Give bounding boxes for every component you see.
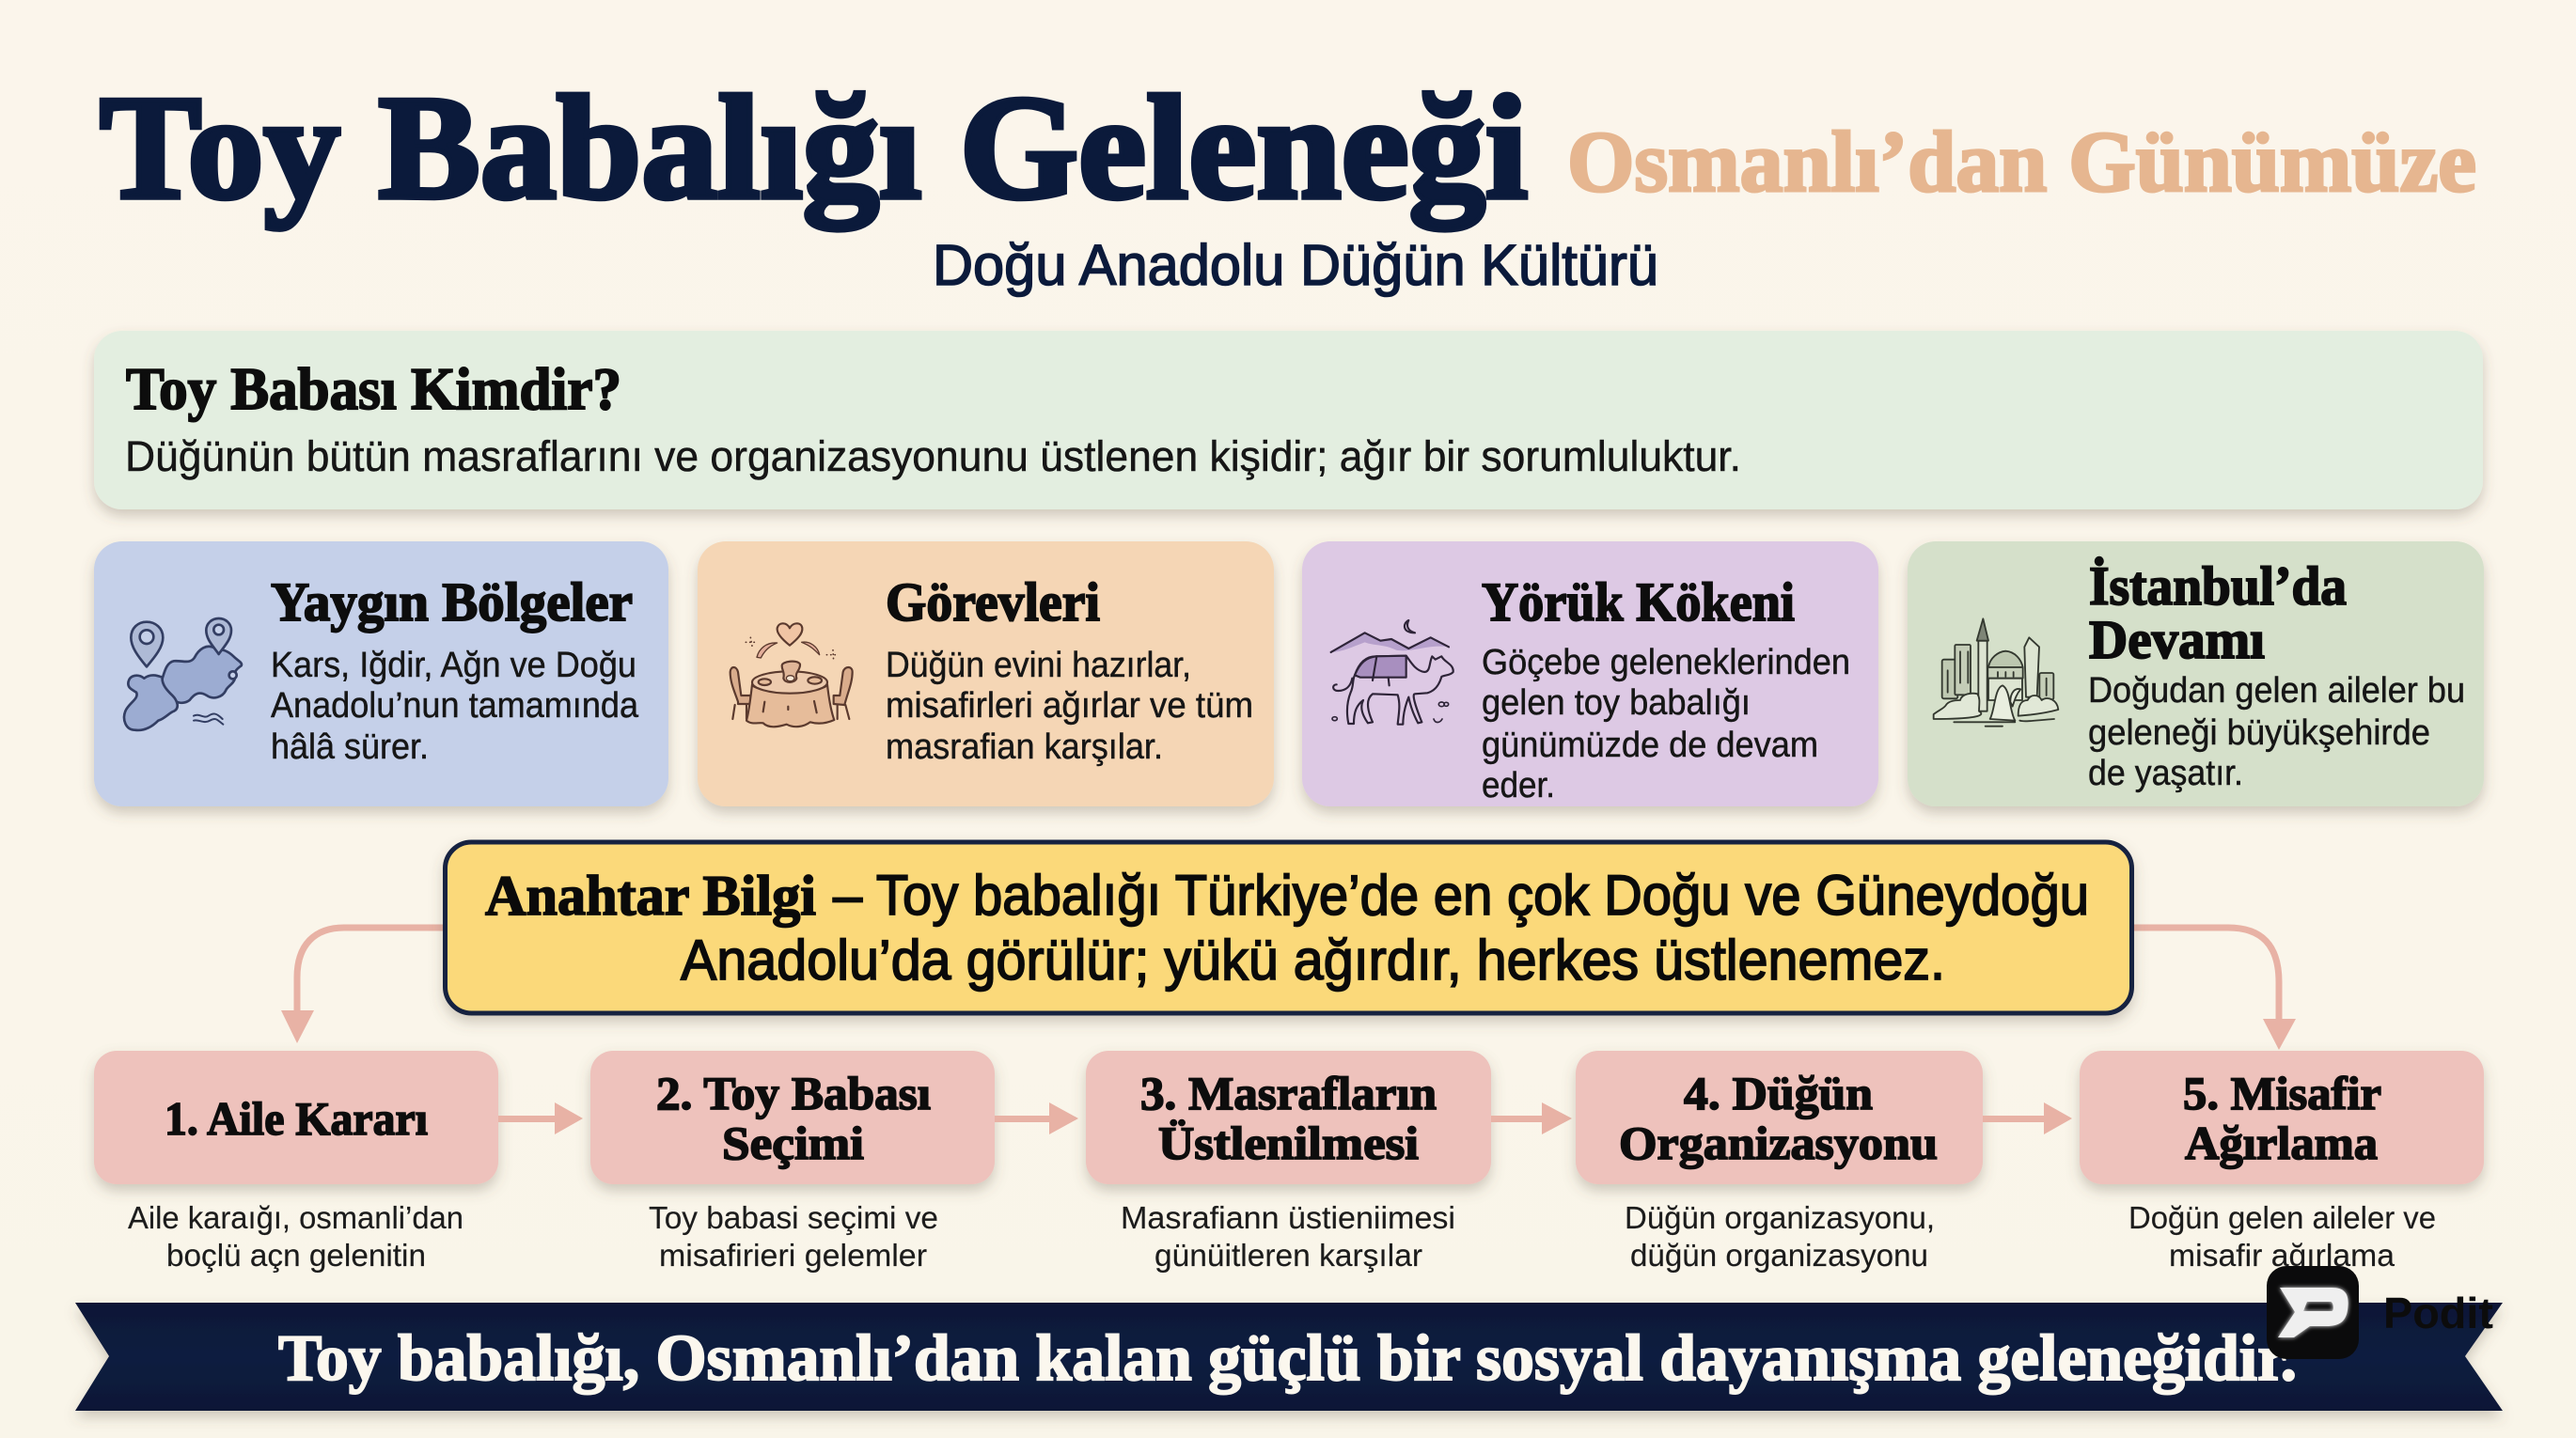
heading: İstanbul'da Devamı: Devamı: [2089, 609, 2265, 670]
ribbon banner: [75, 1303, 2503, 1411]
body: Yörük Kökeni: Göçebe geleneklerinden: [1482, 643, 1850, 682]
definition text: Düğünün bütün masraflarını ve organizasyonunu üstlenen kişidir; ağır bir sorumluluktur.: [125, 432, 1741, 480]
icon: camel and mountains: [1331, 620, 1453, 725]
logo wordmark: Podit: [2383, 1289, 2493, 1337]
step 5: 5. Misafir: [2183, 1067, 2381, 1119]
step 5: [2080, 1051, 2484, 1273]
panel: Yörük Kökeni: [1302, 541, 1878, 806]
step 2 description: Toy babasi seçimi ve: [649, 1200, 938, 1235]
body: Yörük Kökeni: eder.: [1482, 766, 1555, 805]
icon: wedding table: [730, 623, 853, 727]
arrow: step 3 to 4: [1491, 1102, 1572, 1134]
callout text line 1: – Toy babalığı Türkiye’de en çok Doğu ve Güneydoğu: [833, 864, 2089, 927]
step 1 description: boçlü açn gelenitin: [166, 1238, 426, 1273]
step 5 description: Doğün gelen aileler ve: [2128, 1200, 2436, 1235]
step 4: [1576, 1051, 1983, 1273]
body: Yörük Kökeni: [1482, 643, 1850, 805]
body: İstanbul'da Devamı: geleneği büyükşehirde: [2088, 713, 2430, 753]
step 4 description: [1625, 1200, 1935, 1273]
banner text: Toy babalığı, Osmanlı’dan kalan güçlü bir sosyal dayanışma geleneğidir.: [278, 1322, 2297, 1395]
arrow: callout to step 1: [281, 928, 446, 1043]
panel: İstanbul'da Devamı: [1908, 541, 2484, 806]
logo: Podit watermark: [2267, 1266, 2493, 1359]
subtitle: Doğu Anadolu Düğün Kültürü: Doğu Anadolu Düğün Kültürü: [933, 233, 1658, 297]
icon: P mark: [2278, 1288, 2348, 1337]
step 5: Ağırlama: [2185, 1117, 2378, 1169]
body: Yaygın Bölgeler: hâlâ sürer.: [271, 727, 429, 767]
step 3: 3. Masrafların: [1140, 1067, 1437, 1119]
heading: Yaygın Bölgeler: Yaygın Bölgeler: [271, 571, 633, 633]
step 5 description: [2128, 1200, 2436, 1273]
heading: İstanbul'da Devamı: İstanbul’da: [2089, 555, 2347, 617]
heading: Yörük Kökeni: Yörük Kökeni: [1482, 571, 1795, 633]
body: İstanbul'da Devamı: de yaşatır.: [2088, 754, 2243, 793]
step 3 description: [1121, 1200, 1455, 1273]
body: Yaygın Bölgeler: Anadolu’nun tamamında: [271, 686, 639, 726]
body: Görevleri: misafirleri ağırlar ve tüm: [886, 686, 1253, 726]
step 1 description: [128, 1200, 463, 1273]
step 4 description: düğün organizasyonu: [1630, 1238, 1928, 1273]
body: Görevleri: masrafian karşılar.: [886, 727, 1163, 767]
step 1: 1. Aile Kararı: [165, 1092, 428, 1145]
step 4: Organizasyonu: [1619, 1117, 1938, 1169]
body: Yaygın Bölgeler: [271, 646, 639, 767]
callout text line 1: Anahtar Bilgi: [485, 865, 816, 927]
body: İstanbul'da Devamı: [2088, 671, 2465, 793]
arrow: step 4 to 5: [1983, 1102, 2072, 1134]
body: Yörük Kökeni: günümüzde de devam: [1482, 726, 1818, 765]
panel: Yaygın Bölgeler: [94, 541, 668, 806]
step 3 description: Masrafiann üstieniimesi: [1121, 1200, 1455, 1235]
step 3: [1086, 1051, 1491, 1273]
heading: Görevleri: Görevleri: [886, 571, 1100, 633]
title: Toy Babalığı Geleneği: [100, 66, 1528, 230]
body: Yaygın Bölgeler: Kars, Iğdir, Ağn ve Doğu: [271, 646, 636, 685]
body: İstanbul'da Devamı: Doğudan gelen aileler bu: [2088, 671, 2465, 711]
heading: İstanbul'da Devamı: [2089, 555, 2347, 670]
callout text line 2: Anadolu’da görülür; yükü ağırdır, herkes üstlenemez.: [681, 929, 1945, 992]
arrow: step 2 to 3: [995, 1102, 1078, 1134]
step 1 description: Aile karaığı, osmanli’dan: [128, 1200, 463, 1235]
arrow: step 1 to 2: [498, 1102, 583, 1134]
step 3 description: günüitleren karşılar: [1154, 1238, 1422, 1273]
step 3: Üstlenilmesi: [1158, 1117, 1419, 1169]
step 2: [590, 1051, 995, 1273]
panel: Görevleri: [698, 541, 1274, 806]
callout: Anahtar Bilgi: [446, 842, 2132, 1013]
step 2: 2. Toy Babası: [656, 1067, 931, 1119]
body: Görevleri: Düğün evini hazırlar,: [886, 646, 1191, 685]
step 5 description: misafir ağırlama: [2169, 1238, 2395, 1273]
body: Görevleri: [886, 646, 1253, 767]
step 1: [94, 1051, 498, 1273]
panel: Toy Babası Kimdir: [94, 331, 2483, 509]
step 2: Seçimi: [722, 1117, 864, 1169]
icon: Istanbul skyline: [1934, 618, 2058, 727]
subtitle: Osmanlı'dan Günümüze: Osmanlı’dan Günümüze: [1567, 114, 2476, 210]
heading: Toy Babası Kimdir: Toy Babası Kimdir?: [126, 355, 621, 422]
arrow: callout to step 5: [2132, 928, 2296, 1050]
step 2 description: misafirieri gelemler: [659, 1238, 927, 1273]
step 4: 4. Düğün: [1684, 1067, 1873, 1119]
icon: map with pins: [124, 618, 242, 730]
step 4 description: Düğün organizasyonu,: [1625, 1200, 1935, 1235]
step 2 description: [649, 1200, 938, 1273]
body: Yörük Kökeni: gelen toy babalığı: [1482, 683, 1751, 723]
